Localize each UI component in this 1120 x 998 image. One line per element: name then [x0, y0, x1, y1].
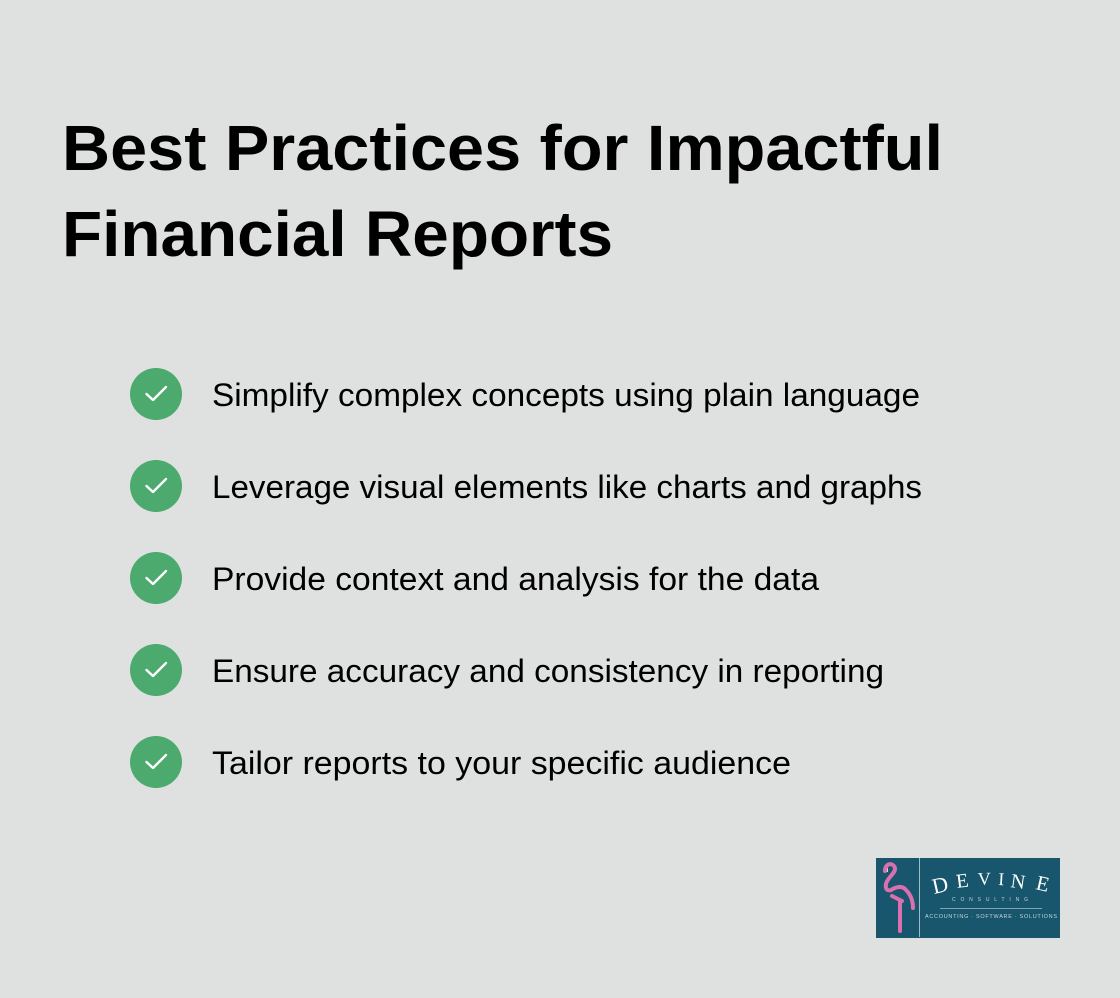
wordmark: E: [1034, 870, 1052, 897]
wordmark: D: [930, 871, 951, 899]
item: tailor reports: Tailor reports to your specific audience: [212, 745, 791, 781]
icon: flamingo: [884, 864, 913, 931]
wordmark: V: [977, 869, 991, 889]
tagline: services: ACCOUNTING · SOFTWARE · SOLUTIONS: [925, 914, 1057, 920]
item: plain language: [130, 368, 920, 420]
item: accuracy and consistency: Ensure accuracy and consistency in reporting: [212, 653, 884, 689]
title: [62, 112, 943, 270]
checklist: [130, 368, 922, 788]
wordmark: N: [1009, 870, 1027, 894]
tagline: consulting: CONSULTING: [952, 897, 1028, 903]
logo: Devine Consulting: [876, 858, 1060, 938]
item: tailor reports: [130, 736, 791, 788]
title: Financial Reports: [62, 198, 613, 270]
item: context and analysis: Provide context and analysis for the data: [212, 561, 819, 597]
wordmark: [930, 869, 1052, 899]
item: visual elements: [130, 460, 922, 512]
item: context and analysis: [130, 552, 819, 604]
wordmark: I: [998, 869, 1005, 889]
item: plain language: Simplify complex concepts using plain language: [212, 377, 920, 413]
title: Best Practices for Impactful: [62, 112, 943, 184]
item: visual elements: Leverage visual elements like charts and graphs: [212, 469, 922, 505]
item: accuracy and consistency: [130, 644, 884, 696]
wordmark: E: [955, 870, 970, 893]
